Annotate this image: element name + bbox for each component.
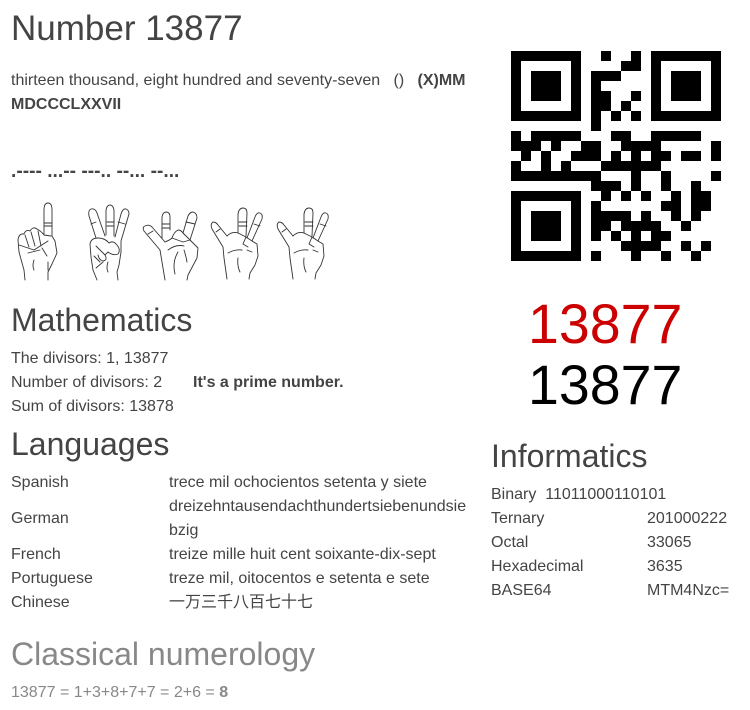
- Hexadecimal label: Hexadecimal: [491, 558, 583, 575]
- language table: treze mil, oitocentos e setenta e sete: [169, 570, 430, 587]
- language table: bzig: [169, 522, 198, 539]
- French label: French: [11, 546, 61, 563]
- number in words and roman numeral: thirteen thousand, eight hundred and seventy-seven () (X)MM: [11, 72, 465, 89]
- Ternary label: Ternary: [491, 510, 544, 527]
- heading: Classical numerology: Classical numerology: [11, 636, 315, 672]
- icon: hand sign 7: [277, 208, 328, 279]
- Spanish label: Spanish: [11, 474, 69, 491]
- numerology formula: 13877 = 1+3+8+7+7 = 2+6 = 8: [11, 684, 228, 701]
- mathematics facts: The divisors: 1, 13877: [11, 350, 168, 367]
- title: Number 13877: [11, 9, 243, 48]
- language table: 一万三千八百七十七: [169, 594, 313, 611]
- BASE64 label: BASE64: [491, 582, 551, 599]
- icon: hand sign 7: [211, 208, 262, 279]
- informatics table: [491, 486, 729, 599]
- Binary row: Binary 11011000110101: [491, 486, 666, 503]
- heading: Languages: Languages: [11, 426, 169, 462]
- language table: [11, 474, 466, 611]
- big number in red: 13877: [528, 293, 682, 355]
- icon: hand sign 3: [89, 205, 129, 280]
- German label: German: [11, 510, 69, 527]
- big number in black: 13877: [528, 354, 682, 416]
- language table: dreizehntausendachthundertsiebenundsie: [169, 498, 466, 515]
- mathematics facts: Number of divisors: 2: [11, 374, 162, 391]
- mathematics facts: Sum of divisors: 13878: [11, 398, 174, 415]
- Octal label: Octal: [491, 534, 528, 551]
- number in words and roman numeral: MDCCCLXXVII: [11, 96, 121, 113]
- number in words and roman numeral: [11, 72, 465, 113]
- Portuguese label: Portuguese: [11, 570, 93, 587]
- QR code: [511, 51, 721, 261]
- mathematics facts: [11, 350, 344, 415]
- informatics table: 33065: [647, 534, 692, 551]
- Chinese label: Chinese: [11, 594, 70, 611]
- prime number note: It's a prime number.: [193, 374, 344, 391]
- language table: trece mil ochocientos setenta y siete: [169, 474, 427, 491]
- morse code: .---- ...-- ---.. --... --...: [11, 161, 179, 182]
- informatics table: MTM4Nzc=: [647, 582, 729, 599]
- heading: Informatics: Informatics: [491, 438, 647, 474]
- language table: treize mille huit cent soixante-dix-sept: [169, 546, 436, 563]
- sign language hands: [18, 202, 329, 280]
- heading: Mathematics: Mathematics: [11, 302, 192, 338]
- informatics table: 201000222: [647, 510, 727, 527]
- informatics table: 3635: [647, 558, 683, 575]
- icon: hand sign 1: [18, 203, 57, 280]
- icon: hand sign 8: [143, 212, 198, 280]
